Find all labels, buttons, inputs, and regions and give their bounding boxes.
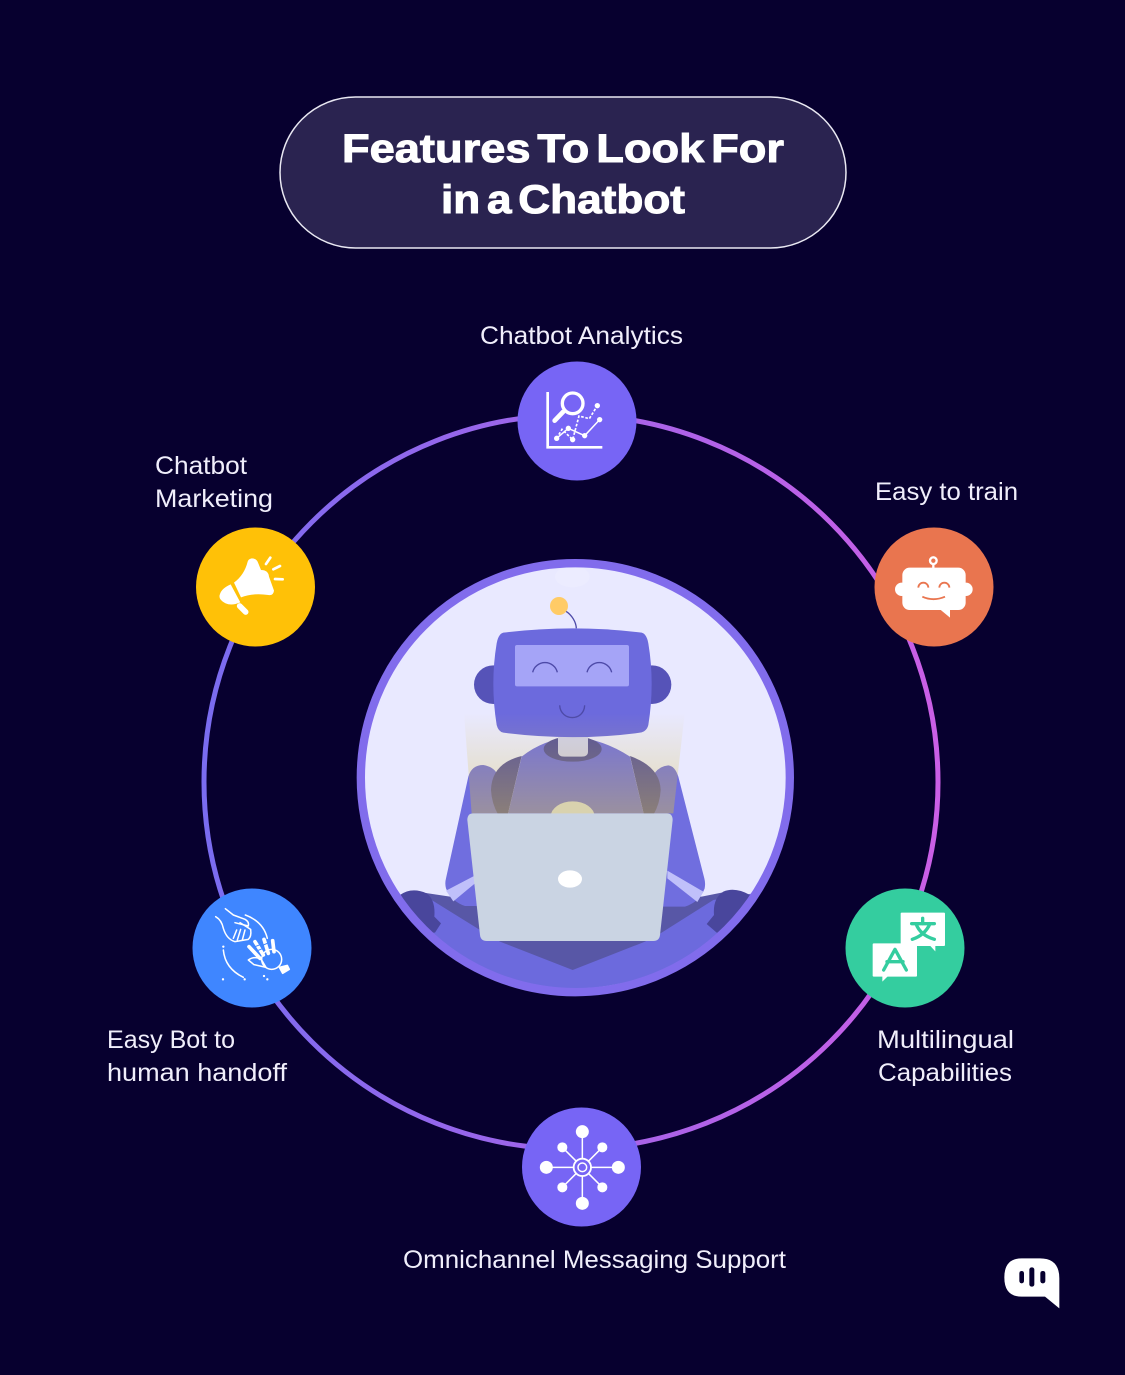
circle [874, 528, 994, 646]
label: Capabilities [878, 1059, 1012, 1087]
label: Marketing [155, 485, 273, 513]
robot visor [515, 645, 629, 686]
robot chest light [551, 801, 594, 814]
robot face [533, 663, 612, 718]
circle [196, 528, 315, 646]
laptop screen glow [465, 724, 683, 814]
robot head [493, 628, 652, 737]
icon: megaphone [219, 558, 283, 612]
label: Multilingual [877, 1026, 1014, 1054]
label [877, 1026, 1014, 1087]
forearm highlights [446, 871, 703, 902]
node: Chatbot Analytics [480, 322, 683, 480]
icon: magnifier and line chart [548, 392, 602, 447]
title: Features To Look For [342, 127, 784, 171]
laptop logo [558, 870, 582, 888]
label: human handoff [107, 1059, 287, 1087]
circle [192, 888, 312, 1008]
title [342, 127, 784, 222]
label: Easy Bot to [107, 1026, 235, 1054]
circle [846, 888, 964, 1008]
circle [522, 1108, 641, 1226]
label [107, 1026, 287, 1087]
icon: bot speech bubble [895, 557, 973, 618]
logo: chat bubble [1004, 1258, 1059, 1308]
laptop [467, 813, 673, 941]
label: Easy to train [875, 478, 1018, 506]
node: Multilingual Capabilities [846, 888, 1014, 1087]
infographic canvas [108, 96, 1060, 1308]
robot arms [445, 765, 705, 907]
node: Omnichannel Messaging Support [403, 1108, 786, 1274]
label: Omnichannel Messaging Support [403, 1246, 786, 1274]
robot torso [508, 737, 644, 815]
icon: human and robot hands [216, 909, 289, 980]
label: Chatbot [155, 452, 247, 480]
robot neck [544, 736, 602, 762]
robot legs [425, 892, 751, 988]
robot antenna [550, 597, 576, 628]
icon: hub network [540, 1125, 625, 1210]
title: in a Chatbot [441, 178, 685, 222]
label: Chatbot Analytics [480, 322, 683, 350]
node: Easy to train [874, 478, 1018, 646]
node: Chatbot Marketing [155, 452, 315, 646]
label [155, 452, 273, 513]
icon: translation bubbles [873, 913, 945, 982]
node: Easy Bot to human handoff [107, 888, 312, 1087]
robot shoulders [491, 756, 661, 815]
central robot illustration [361, 563, 790, 1017]
circle [518, 362, 636, 480]
robot feet [400, 890, 752, 933]
robot ears [474, 665, 671, 704]
connecting ring [204, 415, 938, 1149]
title pill [280, 97, 846, 248]
